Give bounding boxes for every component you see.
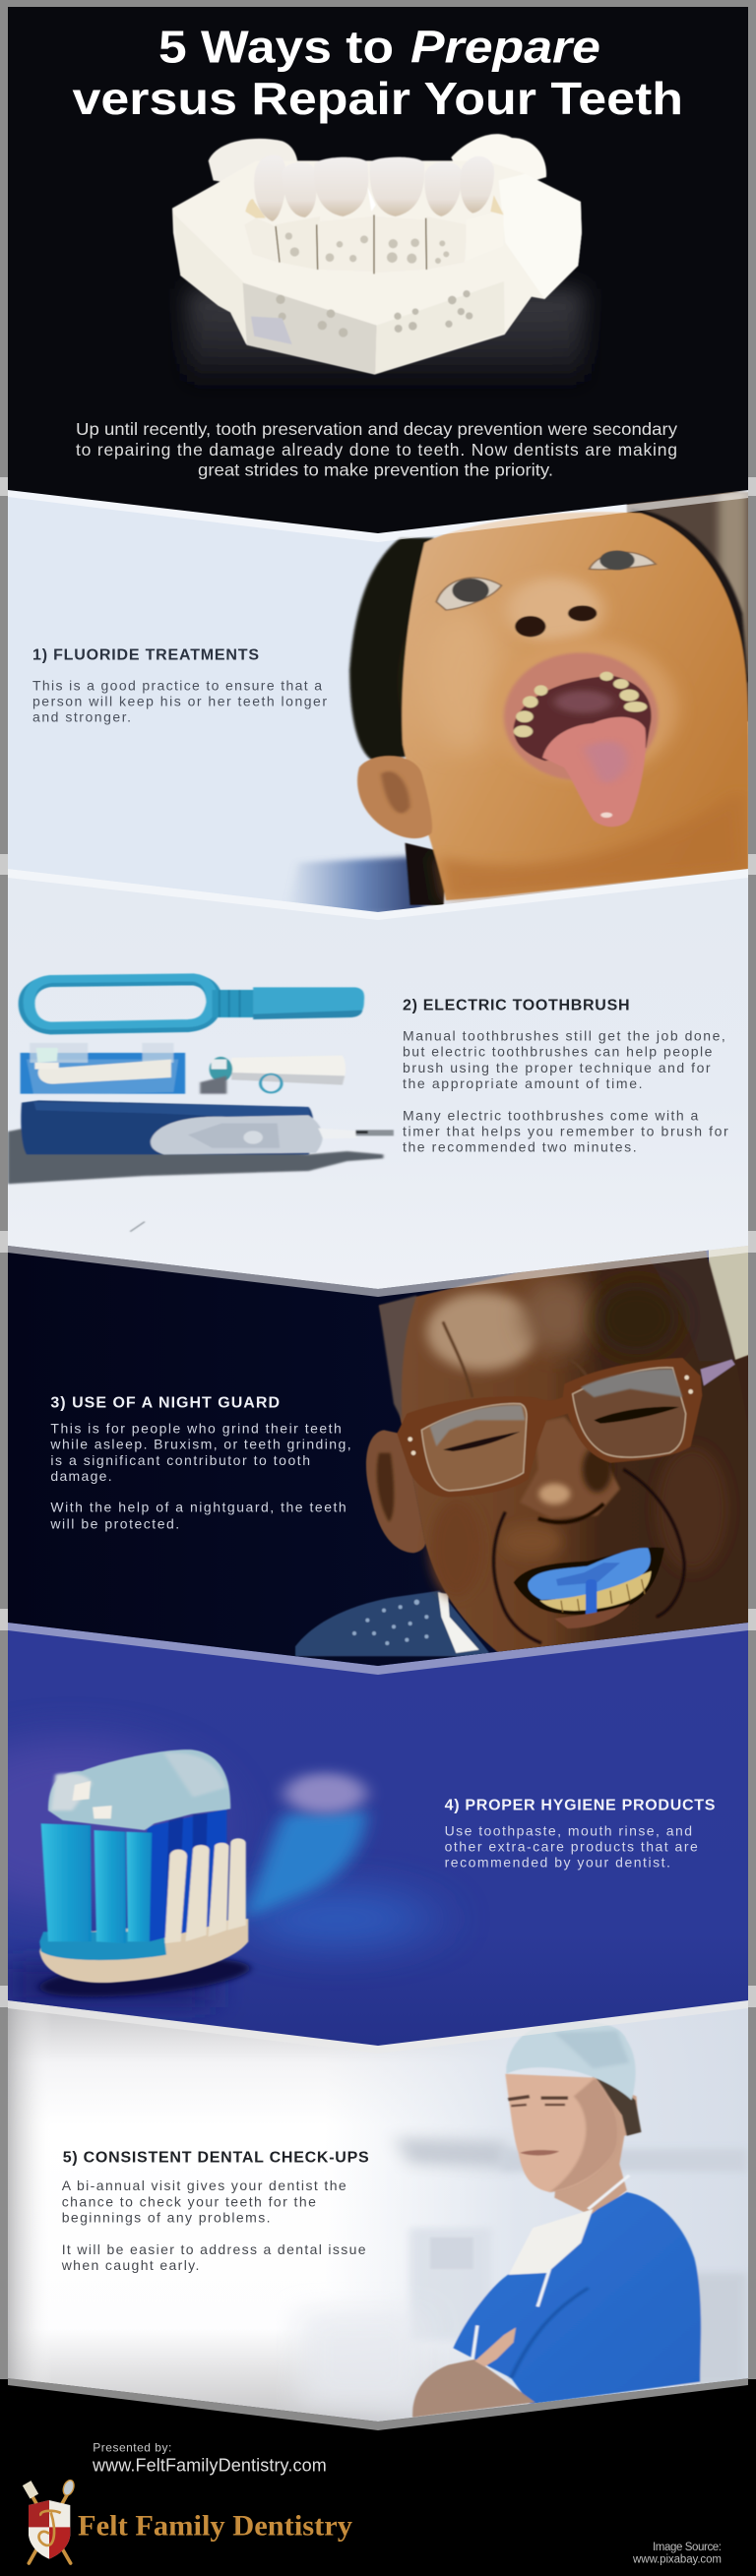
body text: Manual toothbrushes still get the job done, xyxy=(403,1028,725,1044)
dark blue bristles xyxy=(147,1809,226,1941)
presented by label: Presented by: xyxy=(93,2441,171,2455)
blister pack xyxy=(21,1043,185,1095)
panel: section 2 electric toothbrush xyxy=(8,861,748,1294)
right lens xyxy=(573,1368,686,1457)
intro paragraph: Up until recently, tooth preservation and decay prevention were secondary xyxy=(76,419,677,439)
front right face xyxy=(375,281,505,374)
body text: the appropriate amount of time. xyxy=(403,1075,642,1091)
body text: It will be easier to address a dental issue xyxy=(62,2241,366,2257)
photo: dental plaster model xyxy=(172,134,584,381)
crown teeth xyxy=(254,155,494,221)
mouth interior xyxy=(514,676,652,761)
image source credit: Image Source: xyxy=(653,2542,722,2553)
hair stubble xyxy=(654,1257,735,1361)
turquoise bristles xyxy=(41,1823,92,1941)
body text: Use toothpaste, mouth rinse, and xyxy=(445,1823,692,1839)
panel: section 3 night guard xyxy=(8,1235,751,1678)
intro paragraph xyxy=(76,419,677,480)
photo: child with open mouth xyxy=(284,492,752,915)
tooth stumps xyxy=(244,210,504,273)
heading: 1) FLUORIDE TREATMENTS xyxy=(32,647,259,664)
body text: other extra-care products that are xyxy=(445,1839,698,1855)
body text: the recommended two minutes. xyxy=(403,1138,637,1154)
body text: brush using the proper technique and for xyxy=(403,1060,711,1075)
scratch mark xyxy=(130,1222,145,1232)
left ear xyxy=(366,1430,425,1553)
lower teeth xyxy=(539,1571,652,1611)
dentist face xyxy=(505,2074,618,2192)
body text: chance to check your teeth for the xyxy=(62,2194,316,2210)
panel: section 1 fluoride treatments xyxy=(8,482,752,925)
body text: A bi-annual visit gives your dentist the xyxy=(62,2177,346,2193)
body text xyxy=(49,1421,351,1531)
band under section 1 xyxy=(8,869,748,920)
face xyxy=(402,512,749,900)
ear xyxy=(357,756,432,838)
intro paragraph: great strides to make prevention the priority. xyxy=(198,460,553,480)
image source credit xyxy=(632,2542,722,2566)
glasses xyxy=(397,1358,735,1498)
eyes xyxy=(436,550,656,610)
body text: recommended by your dentist. xyxy=(445,1855,670,1871)
spare brush head xyxy=(200,1056,346,1094)
title line two: versus Repair Your Teeth xyxy=(73,73,683,124)
photo: dentist in blue scrubs xyxy=(299,2022,747,2418)
body text: This is a good practice to ensure that a xyxy=(32,678,322,694)
forehead highlight xyxy=(426,1292,538,1371)
heading: 5) CONSISTENT DENTAL CHECK-UPS xyxy=(63,2149,369,2167)
long shadow xyxy=(8,1129,383,1184)
tongue cleaner xyxy=(27,977,364,1029)
crossed arms xyxy=(412,2360,536,2418)
band under section 2 xyxy=(8,1246,748,1297)
intro paragraph: to repairing the damage already done to teeth. Now dentists are making xyxy=(76,440,677,460)
band under section 3 xyxy=(8,1623,748,1675)
model holes xyxy=(276,290,472,337)
cheeks and nose xyxy=(520,1417,620,1518)
panel: footer xyxy=(0,2379,756,2576)
nose xyxy=(506,578,602,643)
night guard stem xyxy=(586,1579,597,1622)
jersey xyxy=(295,1591,492,1656)
toothpaste xyxy=(48,1749,230,1830)
body text: is a significant contributor to tooth xyxy=(50,1452,310,1468)
body text: beginnings of any problems. xyxy=(62,2210,271,2226)
dentist neck and hair xyxy=(554,2076,639,2217)
blue night guard xyxy=(528,1548,651,1600)
photo: toothbrush with toothpaste xyxy=(0,1739,434,2007)
photo: electric toothbrush kit xyxy=(8,977,394,1232)
face mask xyxy=(509,2209,593,2275)
website address: www.FeltFamilyDentistry.com xyxy=(92,2456,327,2476)
body text xyxy=(32,678,327,724)
toothbrush handle xyxy=(21,1100,394,1154)
body text: With the help of a nightguard, the teeth xyxy=(50,1500,346,1515)
lips xyxy=(489,638,677,779)
photo: man with glasses and blue night guard xyxy=(295,1250,751,1656)
lower lip xyxy=(554,1604,630,1628)
mouth xyxy=(514,1548,664,1615)
body text: when caught early. xyxy=(61,2257,199,2273)
band under section 0 xyxy=(8,490,748,542)
body text: person will keep his or her teeth longer xyxy=(32,694,327,709)
heading: 3) USE OF A NIGHT GUARD xyxy=(50,1395,280,1412)
brush head xyxy=(39,1919,248,1983)
body text: timer that helps you remember to brush for xyxy=(403,1123,728,1138)
image source credit: www.pixabay.com xyxy=(632,2554,722,2566)
body text xyxy=(61,2177,366,2273)
title: Prepare xyxy=(410,22,600,73)
collar xyxy=(438,1592,479,1653)
body text: This is for people who grind their teeth xyxy=(50,1421,342,1437)
back teeth xyxy=(209,139,298,187)
teeth xyxy=(514,672,647,737)
hair xyxy=(349,538,434,761)
body text: while asleep. Bruxism, or teeth grinding, xyxy=(49,1437,351,1452)
brush head shadow xyxy=(36,1956,254,1999)
white bristles xyxy=(165,1838,246,1943)
body text: damage. xyxy=(50,1468,112,1484)
heading: 2) ELECTRIC TOOTHBRUSH xyxy=(403,998,630,1014)
body text: will be protected. xyxy=(49,1515,179,1531)
body text: but electric toothbrushes can help people xyxy=(403,1044,713,1060)
panel: section 4 hygiene products xyxy=(0,1614,748,2056)
heading: 4) PROPER HYGIENE PRODUCTS xyxy=(445,1797,716,1813)
plaster base xyxy=(172,160,582,375)
panel: header xyxy=(8,7,748,538)
logo: crossed toothbrush, mirror and shield xyxy=(23,2479,76,2563)
body text xyxy=(445,1823,698,1871)
head xyxy=(379,1250,751,1653)
panel: section 5 dental check-ups xyxy=(8,1993,748,2435)
right ear xyxy=(731,1355,750,1456)
left lens xyxy=(421,1403,527,1491)
temple arm xyxy=(701,1360,735,1385)
body text xyxy=(403,1028,728,1154)
logo wordmark: Felt Family Dentistry xyxy=(78,2510,352,2543)
reflection xyxy=(187,288,584,381)
body text: Many electric toothbrushes come with a xyxy=(403,1107,699,1123)
band under section 4 xyxy=(8,2000,748,2037)
title: 5 Ways to xyxy=(158,22,394,73)
body text: and stronger. xyxy=(32,708,131,724)
scrubs xyxy=(453,2192,701,2404)
surgical cap xyxy=(506,2022,636,2100)
front left face xyxy=(243,282,377,374)
blurred brush handle xyxy=(243,1810,366,1919)
tongue xyxy=(542,717,646,827)
band under section 5 xyxy=(8,2378,748,2430)
